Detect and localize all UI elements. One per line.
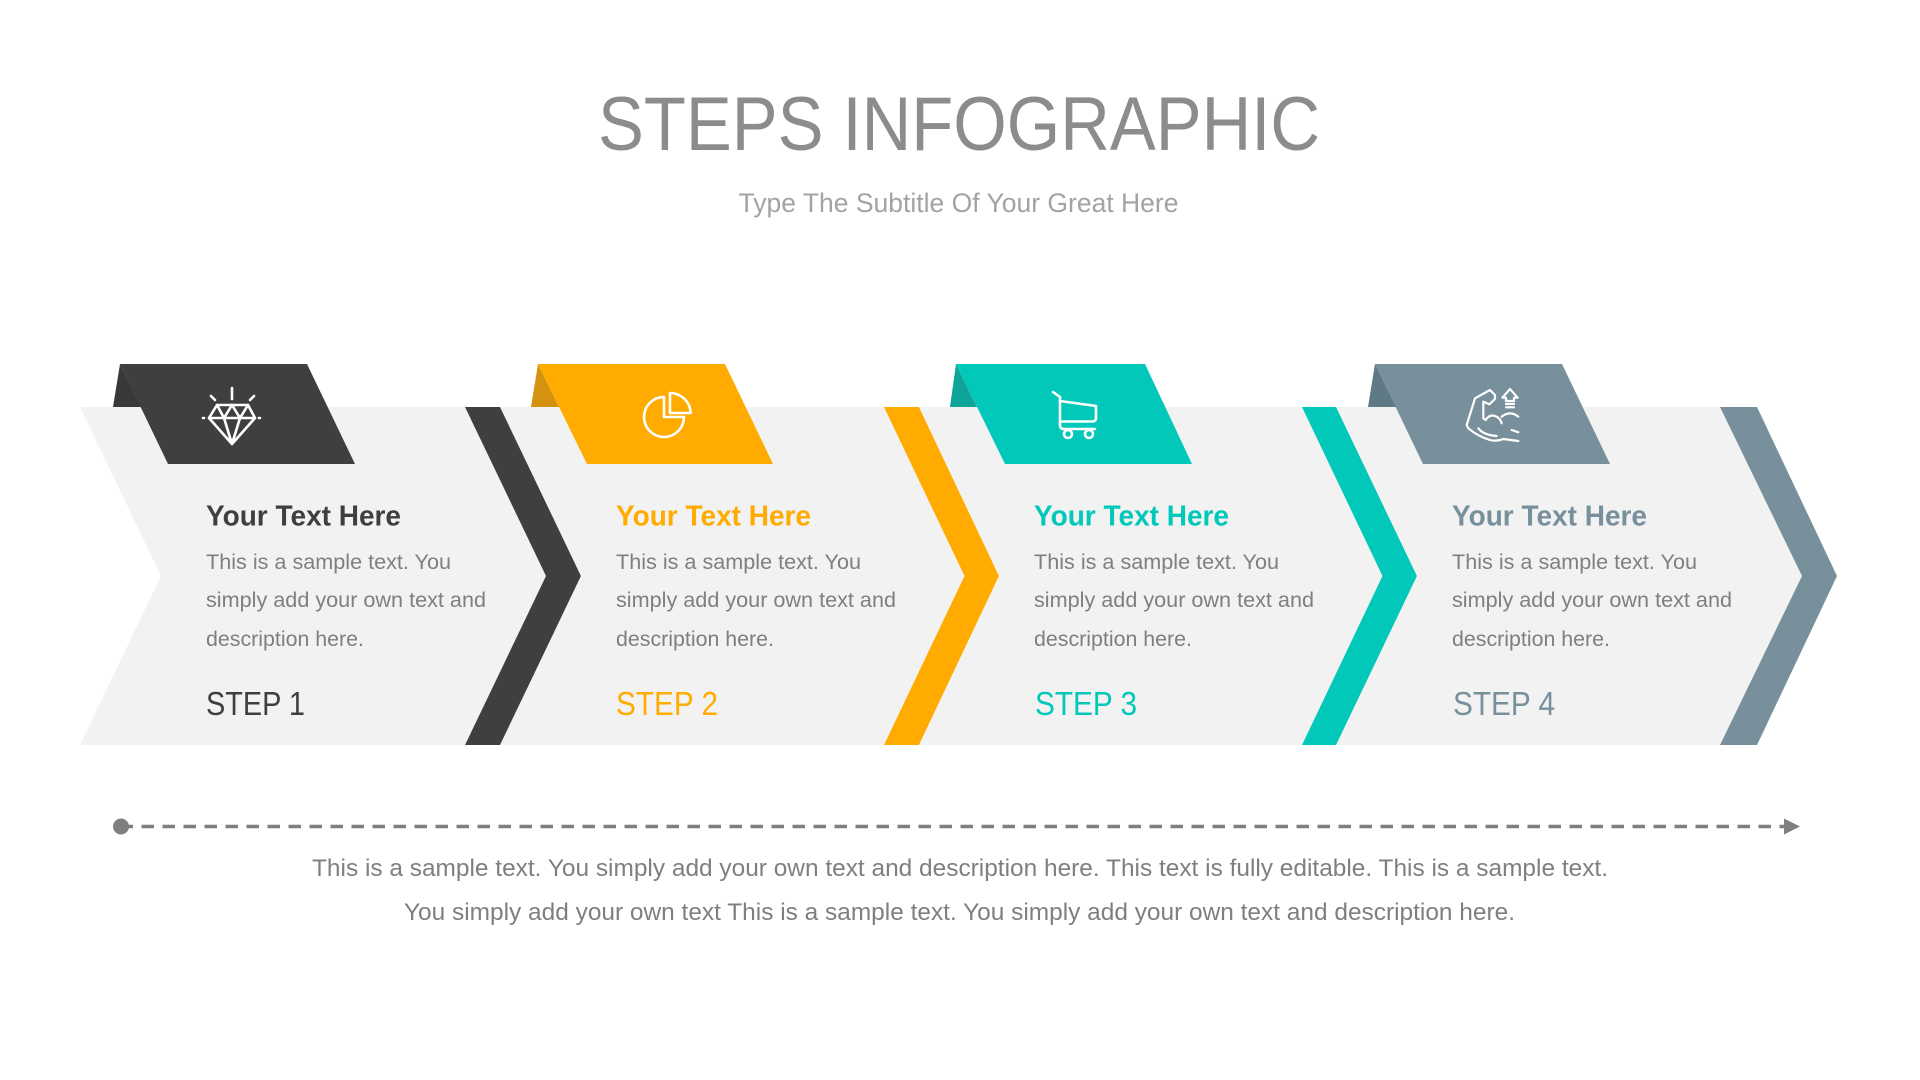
icon: diamond [203, 388, 260, 444]
description: description here. [1034, 627, 1192, 651]
tab [120, 364, 355, 464]
footer text: This is a sample text. You simply add your own text and description here. This text is fully editable. This is a sample text. [312, 855, 1608, 882]
tab [956, 364, 1192, 464]
description: This is a sample text. You [616, 550, 861, 574]
chevron [465, 407, 581, 745]
tab [538, 364, 773, 464]
icon: pie chart [644, 393, 691, 437]
arrow: dashed timeline [113, 818, 1800, 834]
footer text: You simply add your own text This is a sample text. You simply add your own text and description here. [404, 899, 1515, 926]
panel: step 4 [1336, 364, 1837, 745]
arrow body [80, 407, 546, 745]
arrow body [919, 407, 1383, 745]
tab fold [531, 364, 559, 407]
panel: step 1 [80, 364, 581, 745]
heading: Your Text Here [616, 500, 811, 532]
description: description here. [616, 627, 774, 651]
tab fold [1368, 364, 1396, 407]
description [206, 550, 486, 651]
description: simply add your own text and [616, 588, 896, 612]
description [1452, 550, 1732, 651]
tab fold [113, 364, 141, 407]
chevron [884, 407, 999, 745]
description: description here. [206, 627, 364, 651]
step label: STEP 4 [1453, 685, 1555, 722]
step label: STEP 1 [206, 685, 305, 722]
title: STEPS INFOGRAPHIC [598, 82, 1320, 167]
heading: Your Text Here [1452, 500, 1647, 532]
heading: Your Text Here [206, 500, 401, 532]
tab [1375, 364, 1610, 464]
panel: step 2 [500, 364, 999, 745]
description: simply add your own text and [1034, 588, 1314, 612]
chevron [1302, 407, 1417, 745]
description: This is a sample text. You [1034, 550, 1279, 574]
icon: muscle arm [1467, 389, 1518, 441]
panel: step 3 [919, 364, 1417, 745]
description: This is a sample text. You [206, 550, 451, 574]
description [616, 550, 896, 651]
description: description here. [1452, 627, 1610, 651]
description: simply add your own text and [1452, 588, 1732, 612]
step label: STEP 3 [1035, 685, 1137, 722]
arrow body [1336, 407, 1802, 745]
heading: Your Text Here [1034, 500, 1229, 532]
icon: shopping cart [1053, 392, 1096, 438]
description [1034, 550, 1314, 651]
footer text [312, 855, 1608, 926]
description: This is a sample text. You [1452, 550, 1697, 574]
subtitle: Type The Subtitle Of Your Great Here [738, 188, 1178, 218]
description: simply add your own text and [206, 588, 486, 612]
arrow body [500, 407, 965, 745]
tab fold [950, 364, 977, 407]
chevron [1720, 407, 1837, 745]
step label: STEP 2 [616, 685, 718, 722]
